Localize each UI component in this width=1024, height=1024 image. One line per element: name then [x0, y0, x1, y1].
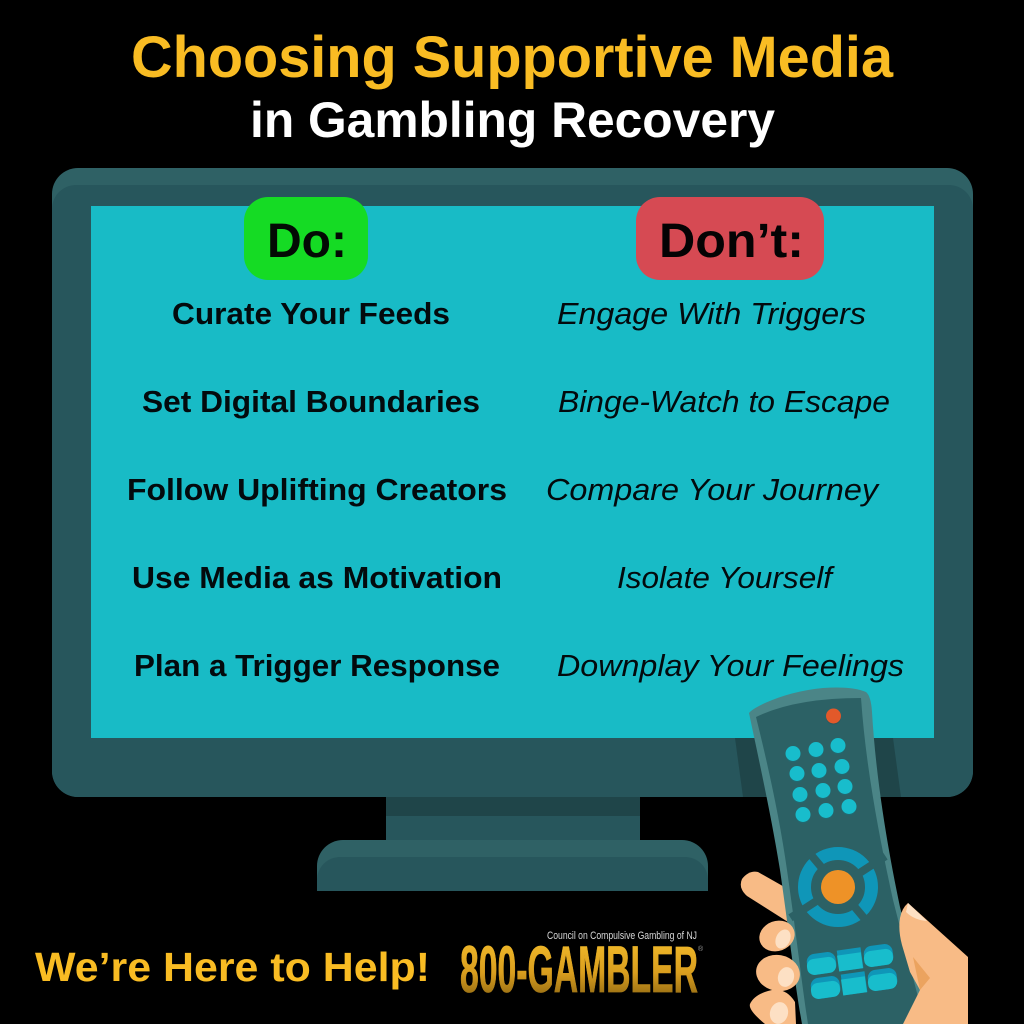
icon: remote control [749, 688, 930, 1024]
list: don't items: Binge-Watch to Escape [558, 384, 890, 419]
monitor stand [317, 797, 708, 891]
remote shadow on monitor [735, 738, 901, 797]
icon: palm and thumb [899, 903, 968, 1024]
list: do items: Plan a Trigger Response [134, 648, 500, 683]
logo: 800-GAMBLER [460, 930, 704, 1006]
list: don't items: Downplay Your Feelings [557, 648, 904, 683]
badge: Don't: Don’t: [659, 215, 804, 268]
icon: index finger behind remote [741, 872, 788, 922]
badge: Don't [636, 197, 824, 280]
icon: fingers [750, 916, 803, 1024]
list: don't items: Engage With Triggers [557, 296, 866, 331]
list: don't items: Isolate Yourself [617, 560, 835, 595]
logo: 800-GAMBLER: Council on Compulsive Gambling of NJ [547, 930, 697, 942]
list: do items [127, 296, 507, 683]
list: do items: Set Digital Boundaries [142, 384, 480, 419]
title: Choosing Supportive Media [131, 25, 894, 90]
list: do items: Curate Your Feeds [172, 296, 450, 331]
remote navigation ring [791, 840, 885, 934]
screen [91, 206, 934, 738]
list: don't items [546, 296, 904, 683]
logo: 800-GAMBLER: ® [698, 945, 704, 953]
list: do items: Use Media as Motivation [132, 560, 502, 595]
remote bottom buttons [806, 943, 898, 1000]
list: do items: Follow Uplifting Creators [127, 472, 507, 507]
logo: 800-GAMBLER: 800-GAMBLER [460, 932, 698, 1006]
badge: Do: Do: [267, 215, 347, 268]
title [131, 25, 894, 148]
badge: Do [244, 197, 368, 280]
monitor frame [52, 168, 973, 797]
remote power button [826, 708, 841, 724]
list: don't items: Compare Your Journey [546, 472, 881, 507]
tagline: We’re Here to Help! [35, 944, 430, 990]
title: in Gambling Recovery [250, 92, 775, 148]
remote number keypad [786, 738, 856, 824]
